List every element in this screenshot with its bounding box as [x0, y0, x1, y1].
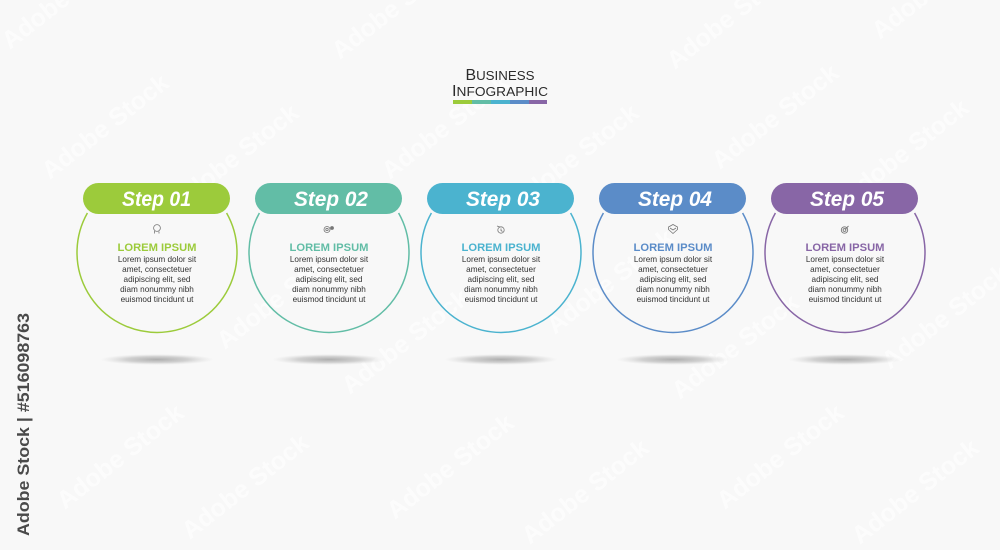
step 05 pill	[771, 183, 918, 214]
step 03 text: Lorem ipsum dolor sit	[462, 255, 541, 264]
step 05 heading: LOREM IPSUM	[806, 242, 884, 254]
step 01 text: adipiscing elit, sed	[124, 275, 191, 284]
step 02 text: amet, consectetuer	[294, 265, 364, 274]
text: Adobe Stock	[166, 99, 304, 215]
step 04 text	[634, 255, 713, 304]
title colour bar	[453, 100, 547, 104]
icon: target	[841, 226, 848, 233]
icon: head	[154, 225, 160, 234]
step 03 heading: LOREM IPSUM	[462, 242, 540, 254]
text: Adobe Stock	[516, 434, 654, 550]
step 03 text: adipiscing elit, sed	[468, 275, 535, 284]
step 01 heading: LOREM IPSUM	[118, 242, 196, 254]
text: Adobe Stock	[176, 429, 314, 545]
step 04 text: euismod tincidunt ut	[637, 295, 710, 304]
step 04 text: amet, consectetuer	[638, 265, 708, 274]
step 02 text	[290, 255, 369, 304]
circle outline 01	[77, 213, 237, 332]
step 04 text: Lorem ipsum dolor sit	[634, 255, 713, 264]
panel: step 04	[593, 183, 753, 365]
text: Adobe Stock	[506, 99, 644, 215]
panel: step 02	[249, 183, 409, 365]
icon: handshake	[668, 224, 678, 234]
shadow 04	[616, 354, 730, 365]
step 02 text: adipiscing elit, sed	[296, 275, 363, 284]
stock credit: Adobe Stock | #516098763	[14, 313, 33, 536]
step 01 label: Step 01	[122, 188, 191, 211]
step 04 label: Step 04	[638, 188, 712, 211]
text: Adobe Stock	[706, 59, 844, 175]
text: Adobe Stock	[336, 284, 474, 400]
shadow 02	[272, 354, 386, 365]
step 01 text: amet, consectetuer	[122, 265, 192, 274]
text: Adobe Stock	[376, 69, 514, 185]
text: Adobe Stock	[211, 239, 349, 355]
step 05 text: adipiscing elit, sed	[812, 275, 879, 284]
step 02 text: diam nonummy nibh	[292, 285, 366, 294]
step 05 text: euismod tincidunt ut	[809, 295, 882, 304]
panel: step 05	[765, 183, 925, 365]
title	[452, 67, 548, 100]
step 05 text: Lorem ipsum dolor sit	[806, 255, 885, 264]
step 03 label: Step 03	[466, 188, 540, 211]
step 03 text: diam nonummy nibh	[464, 285, 538, 294]
text: Adobe Stock	[36, 69, 174, 185]
step 04 heading: LOREM IPSUM	[634, 242, 712, 254]
step 01 text: Lorem ipsum dolor sit	[118, 255, 197, 264]
step 03 text: amet, consectetuer	[466, 265, 536, 274]
text: Adobe Stock	[711, 399, 849, 515]
step 05 text: amet, consectetuer	[810, 265, 880, 274]
step 02 text: Lorem ipsum dolor sit	[290, 255, 369, 264]
text: Adobe Stock	[381, 409, 519, 525]
step 03 text: euismod tincidunt ut	[465, 295, 538, 304]
shadow 05	[788, 354, 902, 365]
step 02 heading: LOREM IPSUM	[290, 242, 368, 254]
step 03 text	[462, 255, 541, 304]
step 01 text: euismod tincidunt ut	[121, 295, 194, 304]
text: Adobe Stock	[51, 399, 189, 515]
circle outline 04	[593, 213, 753, 332]
step 02 text: euismod tincidunt ut	[293, 295, 366, 304]
step 01 text	[118, 255, 197, 304]
step 04 text: diam nonummy nibh	[636, 285, 710, 294]
circle outline 02	[249, 213, 409, 332]
step 01 pill	[83, 183, 230, 214]
icon: gears	[324, 226, 334, 232]
panel: step 03	[421, 183, 581, 365]
step 04 text: adipiscing elit, sed	[640, 275, 707, 284]
step 02 label: Step 02	[294, 188, 368, 211]
icon: clock	[497, 226, 504, 233]
text: Adobe Stock	[836, 94, 974, 210]
shadow 03	[444, 354, 558, 365]
title: INFOGRAPHIC	[452, 83, 548, 100]
step 05 text	[806, 255, 885, 304]
panel: step 01	[77, 183, 237, 365]
shadow 01	[100, 354, 214, 365]
text: Adobe Stock	[541, 224, 679, 340]
step 02 pill	[255, 183, 402, 214]
step 05 label: Step 05	[810, 188, 884, 211]
text: Adobe Stock	[846, 434, 984, 550]
step 03 pill	[427, 183, 574, 214]
text: Adobe Stock	[666, 289, 804, 405]
step 05 text: diam nonummy nibh	[808, 285, 882, 294]
step 04 pill	[599, 183, 746, 214]
circle outline 05	[765, 213, 925, 332]
step 01 text: diam nonummy nibh	[120, 285, 194, 294]
title: BUSINESS	[466, 67, 535, 84]
circle outline 03	[421, 213, 581, 332]
